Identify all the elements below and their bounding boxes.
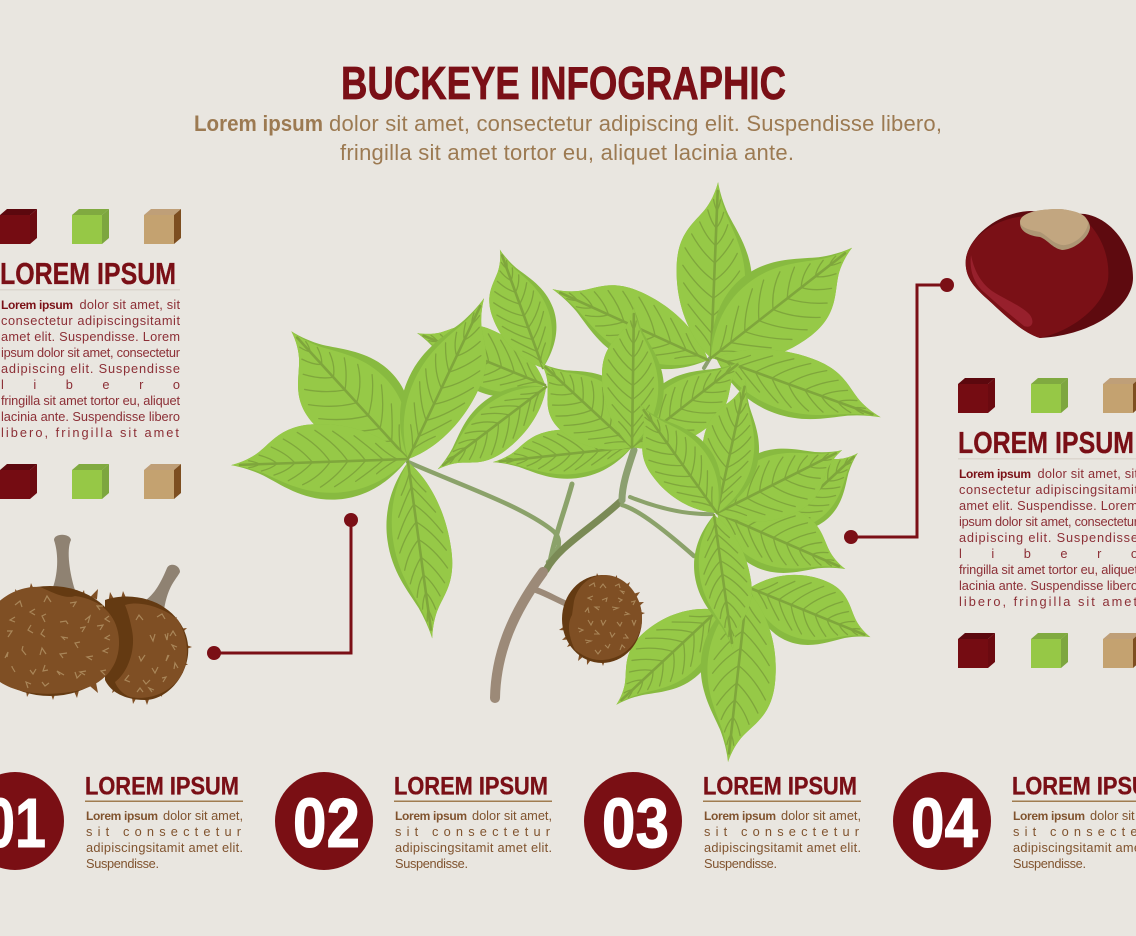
leaf 16 [615, 387, 742, 531]
back burr [105, 591, 192, 705]
leaf 18 [701, 419, 858, 544]
heading: LOREM IPSUM [0, 256, 176, 291]
text [1012, 800, 1136, 871]
bottom cube row [958, 633, 1136, 668]
divider and paragraph: libero, fringilla sit amet [1, 425, 179, 440]
divider and paragraph: adipiscing elit. Suspendisse [1, 361, 180, 376]
leaf 15 [538, 258, 722, 391]
text [394, 800, 552, 871]
illustration: chestnut [966, 209, 1133, 338]
text: sit consectetur [704, 824, 860, 839]
text: dolor sit amet, [781, 808, 861, 823]
divider and paragraph: adipiscing elit. Suspendisse [959, 530, 1136, 545]
leaf 4 [377, 458, 463, 643]
subtitle: Lorem ipsum [194, 111, 323, 136]
leaf 7 [422, 366, 562, 490]
heading: LOREM IPSUM [85, 772, 239, 800]
burr stem front [52, 535, 75, 590]
divider and paragraph [958, 458, 1136, 609]
text: Lorem ipsum [704, 809, 776, 823]
front burr [0, 583, 120, 700]
divider and paragraph: l i b e r o [1, 377, 180, 392]
heading: LOREM IPSUM [703, 772, 857, 800]
number badge [893, 772, 991, 870]
leaf 19 [756, 433, 876, 550]
top cube row [0, 209, 181, 244]
divider and paragraph: ipsum dolor sit amet, consectetur [959, 514, 1136, 529]
leaf 17 [689, 374, 774, 519]
bottom cube row [0, 464, 181, 499]
divider and paragraph: lacinia ante. Suspendisse libero [959, 578, 1136, 593]
stems [408, 358, 712, 698]
connector: branch to nut [844, 278, 954, 544]
text: sit consectetur [395, 824, 551, 839]
leaf 14 [705, 328, 891, 447]
panel: left text block [0, 209, 181, 499]
text: sit consectetur [86, 824, 242, 839]
text: Suspendisse. [704, 856, 777, 871]
number badge [275, 772, 373, 870]
leaf 8 [490, 422, 635, 487]
leaf 11 [613, 336, 762, 471]
item 01 [0, 772, 243, 871]
panel: right text block [958, 378, 1136, 668]
burr stem back [143, 565, 180, 610]
leaf 24 [687, 511, 760, 654]
illustration: two burrs [0, 535, 192, 705]
leaf 21 [737, 556, 884, 670]
text: Lorem ipsum [1013, 809, 1085, 823]
leaf 3 [377, 284, 515, 474]
leaf 13 [684, 213, 879, 393]
divider and paragraph: ipsum dolor sit amet, consectetur [1, 345, 181, 360]
divider and paragraph: dolor sit amet, sit [1038, 466, 1136, 481]
illustration: buckeye branch [230, 181, 891, 766]
leaf 12 [673, 181, 756, 360]
item 03 [584, 772, 861, 871]
text: adipiscingsitamit amet elit. [704, 840, 861, 855]
item 02 [275, 772, 552, 871]
number badge: 02 [293, 784, 360, 862]
divider and paragraph: Lorem ipsum [959, 467, 1031, 481]
divider and paragraph: l i b e r o [959, 546, 1136, 561]
leaf 20 [703, 482, 859, 600]
divider and paragraph: fringilla sit amet tortor eu, aliquet [959, 562, 1136, 577]
item 04 [893, 772, 1136, 871]
leaf 10 [601, 307, 665, 447]
divider and paragraph: Lorem ipsum [1, 298, 73, 312]
leaf 22 [593, 585, 741, 730]
divider and paragraph: consectetur adipiscingsitamit [1, 313, 180, 328]
text: Lorem ipsum [86, 809, 158, 823]
top cube row [958, 378, 1136, 413]
connector: burrs to branch [207, 513, 358, 660]
divider and paragraph: fringilla sit amet tortor eu, aliquet [1, 393, 180, 408]
heading: LOREM IPSUM [394, 772, 548, 800]
text [703, 800, 861, 871]
divider and paragraph: dolor sit amet, sit [80, 297, 180, 312]
text: Suspendisse. [395, 856, 468, 871]
text: Suspendisse. [86, 856, 159, 871]
divider and paragraph: consectetur adipiscingsitamit [959, 482, 1136, 497]
divider and paragraph: amet elit. Suspendisse. Lorem [1, 329, 180, 344]
subtitle: dolor sit amet, consectetur adipiscing elit. Suspendisse libero, [329, 111, 942, 136]
text: Suspendisse. [1013, 856, 1086, 871]
text [85, 800, 243, 871]
text: Lorem ipsum [395, 809, 467, 823]
title: BUCKEYE INFOGRAPHIC [341, 57, 786, 109]
leaf 6 [472, 239, 571, 378]
leaf 23 [690, 586, 785, 766]
number badge: 04 [911, 784, 978, 862]
leaf 2 [257, 300, 442, 490]
divider and paragraph: amet elit. Suspendisse. Lorem [959, 498, 1136, 513]
divider and paragraph [0, 289, 181, 440]
divider and paragraph: lacinia ante. Suspendisse libero [1, 409, 180, 424]
leaf 5 [405, 304, 557, 414]
subtitle [194, 111, 942, 165]
text: adipiscingsitamit amet elit. [395, 840, 552, 855]
number badge: 03 [602, 784, 669, 862]
leaf 1 [230, 421, 409, 503]
number badge [584, 772, 682, 870]
branch burr [558, 573, 645, 666]
divider and paragraph: libero, fringilla sit amet [959, 594, 1136, 609]
subtitle: fringilla sit amet tortor eu, aliquet lacinia ante. [340, 140, 794, 165]
leaf 9 [516, 336, 656, 473]
text: dolor sit amet, [163, 808, 243, 823]
text: dolor sit amet, [472, 808, 552, 823]
text: adipiscingsitamit amet elit. [86, 840, 243, 855]
